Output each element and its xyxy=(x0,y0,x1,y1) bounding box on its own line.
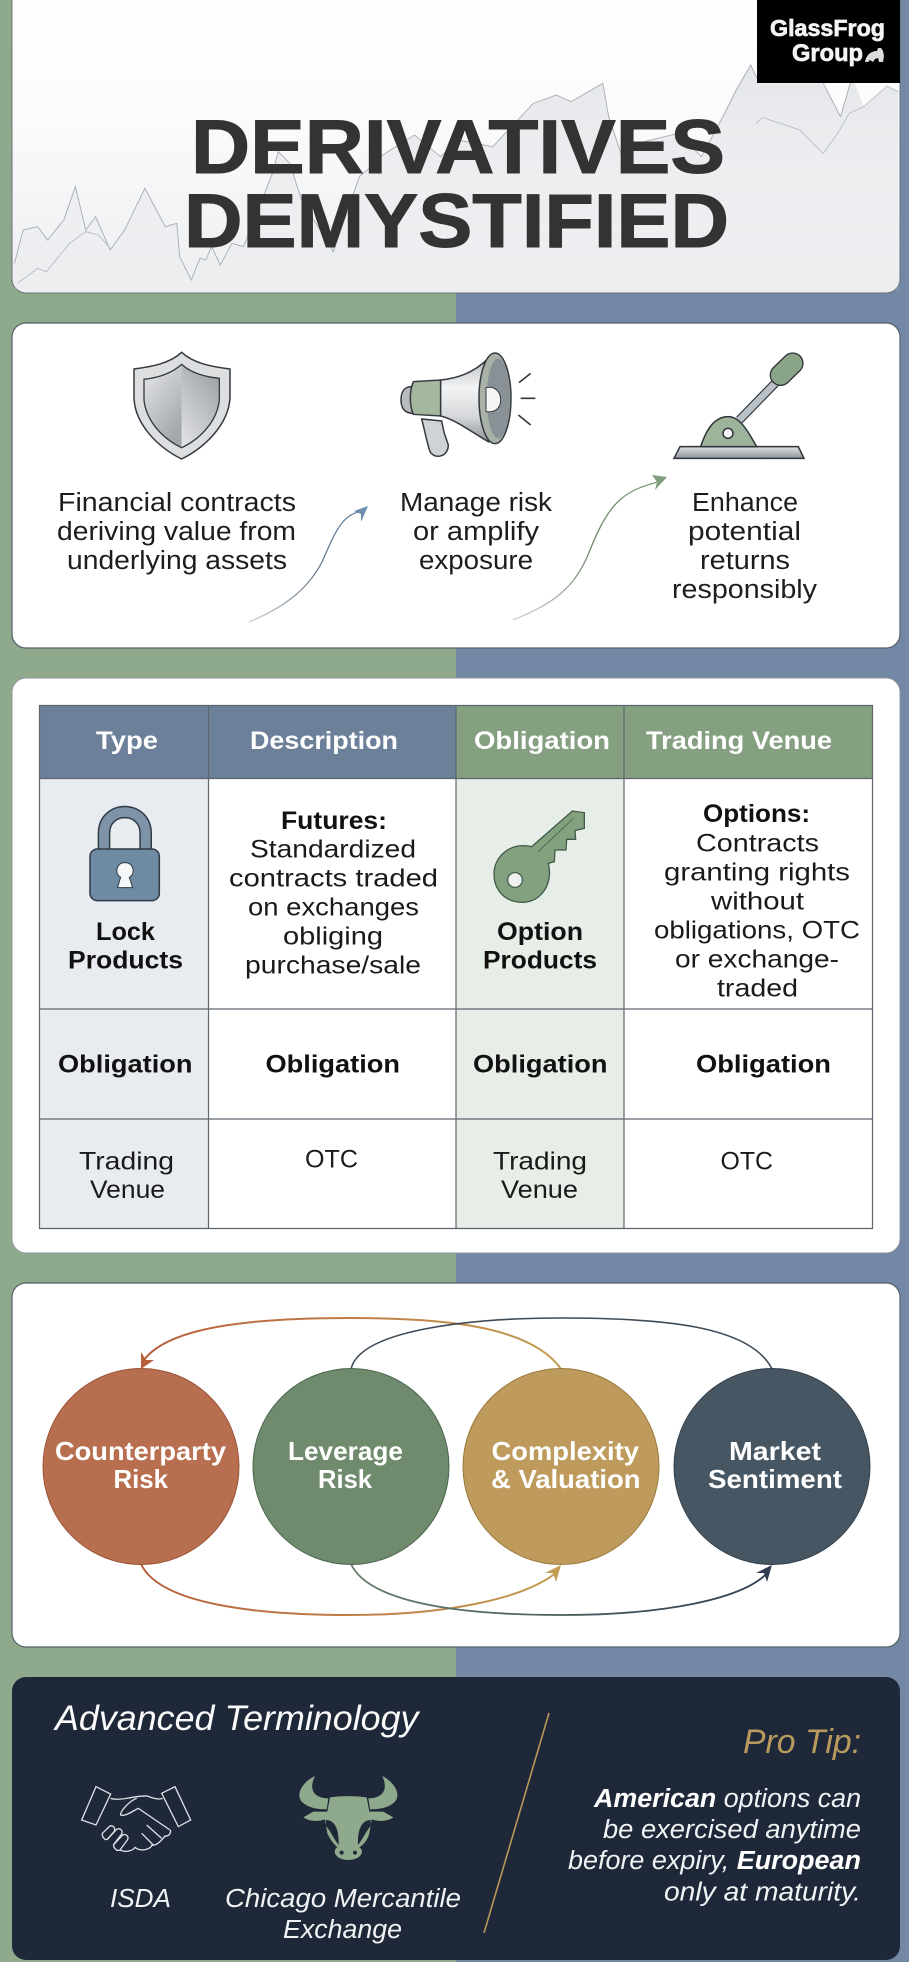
icon: key xyxy=(494,811,584,902)
table row: obligation: Obligation xyxy=(266,1050,400,1078)
label: chicago mercantile exchange xyxy=(225,1885,461,1944)
text: manage risk xyxy=(400,489,552,575)
text: pro tip body: only at maturity. xyxy=(664,1878,861,1906)
icon: handshake xyxy=(82,1787,191,1851)
icon: megaphone xyxy=(401,353,535,456)
text: option products: Option xyxy=(497,918,583,946)
text: options description: Contracts xyxy=(696,830,819,858)
table row: obligation: Obligation xyxy=(473,1050,608,1078)
node: complexity and valuation xyxy=(463,1368,659,1564)
text: futures description: Futures: xyxy=(281,807,387,835)
label: ISDA: ISDA xyxy=(110,1885,171,1913)
text: enhance returns: responsibly xyxy=(672,576,817,604)
text: futures description: Standardized xyxy=(250,836,416,864)
node: counterparty risk xyxy=(43,1368,239,1564)
node: leverage risk: Leverage xyxy=(288,1436,403,1466)
icon: lever xyxy=(674,363,804,458)
panel: hero title xyxy=(12,0,900,293)
panel: risk cycle xyxy=(12,1283,900,1647)
title: DERIVATIVES xyxy=(191,105,725,190)
node: counterparty risk: Risk xyxy=(114,1464,169,1494)
table xyxy=(40,706,872,1228)
text: options description: granting rights xyxy=(664,858,850,886)
icon: shield xyxy=(134,352,230,459)
text: options description: traded xyxy=(717,974,798,1002)
table row: trading venue: Venue xyxy=(501,1176,578,1204)
text: financial contracts xyxy=(57,489,296,575)
arrow: leverage to market sentiment top xyxy=(351,1318,772,1369)
text: options description: Options: xyxy=(703,800,810,828)
table row: trading venue: Venue xyxy=(90,1176,165,1204)
label: chicago mercantile exchange: Chicago Mercantile xyxy=(225,1885,461,1913)
text: financial contracts: Financial contracts xyxy=(58,489,296,517)
table row: obligation: Obligation xyxy=(696,1050,831,1078)
logo: GlassFrog Group xyxy=(757,0,900,83)
table row: trading venue: OTC xyxy=(305,1146,358,1174)
table row: trading venue: Trading xyxy=(79,1148,174,1176)
node: complexity and valuation: Complexity xyxy=(492,1436,640,1466)
table header xyxy=(96,727,832,755)
arrow: blue curve xyxy=(249,506,368,622)
table row: trading venue: Trading xyxy=(493,1148,587,1176)
node: leverage risk xyxy=(253,1368,449,1564)
text: enhance returns: Enhance xyxy=(692,489,798,517)
node: counterparty risk: Counterparty xyxy=(55,1436,227,1466)
text: pro tip body: American options can xyxy=(593,1785,861,1813)
text: options description: without xyxy=(710,888,804,916)
panel: advanced terminology xyxy=(12,1677,900,1960)
arrow: counterparty to complexity xyxy=(141,1564,561,1615)
table header: Type xyxy=(96,727,158,755)
logo: GlassFrog Group: Group xyxy=(792,40,863,67)
divider: gold slash xyxy=(484,1713,549,1933)
text: option products: Products xyxy=(483,946,597,974)
arrow: complexity to counterparty xyxy=(141,1318,561,1369)
table row: obligation: Obligation xyxy=(58,1050,192,1078)
table row: trading venue: OTC xyxy=(720,1148,773,1176)
heading: pro tip: Pro Tip: xyxy=(743,1723,861,1761)
title: DEMYSTIFIED xyxy=(184,179,729,264)
panel: product comparison table xyxy=(12,678,900,1253)
text: futures description: on exchanges xyxy=(248,894,419,922)
text: enhance returns xyxy=(672,489,817,604)
table header: Obligation xyxy=(474,727,610,755)
text: options description: obligations, OTC xyxy=(654,916,860,944)
arrow: green curve xyxy=(513,475,667,620)
label: chicago mercantile exchange: Exchange xyxy=(283,1916,402,1944)
table row: obligation xyxy=(58,1050,831,1078)
text: options description xyxy=(654,800,860,1002)
node: complexity and valuation: & Valuation xyxy=(491,1464,640,1494)
text: futures description: purchase/sale xyxy=(245,952,421,980)
text: pro tip body: before expiry, European xyxy=(568,1847,861,1875)
logo: GlassFrog Group: GlassFrog xyxy=(770,15,885,41)
text: manage risk: Manage risk xyxy=(400,489,552,517)
text: pro tip body xyxy=(568,1785,861,1906)
text: lock products: Lock xyxy=(96,918,155,946)
panel: key benefits xyxy=(12,323,900,648)
arrow: leverage to market sentiment bottom xyxy=(351,1564,772,1615)
text: futures description xyxy=(229,807,438,980)
node: leverage risk: Risk xyxy=(318,1464,373,1494)
text: financial contracts: deriving value from xyxy=(57,518,296,546)
text: option products xyxy=(483,918,597,974)
table header: Description xyxy=(250,727,398,755)
text: futures description: obliging xyxy=(283,922,383,950)
text: lock products xyxy=(68,918,183,974)
icon: bull head xyxy=(299,1776,397,1860)
text: enhance returns: returns xyxy=(700,547,790,575)
table header: Trading Venue xyxy=(646,727,832,755)
heading: advanced terminology: Advanced Terminology xyxy=(53,1699,421,1738)
text: pro tip body: be exercised anytime xyxy=(603,1816,861,1844)
node: market sentiment: Sentiment xyxy=(708,1464,842,1494)
text: futures description: contracts traded xyxy=(229,864,438,892)
text: enhance returns: potential xyxy=(688,518,801,546)
icon: padlock xyxy=(90,812,159,901)
text: manage risk: or amplify xyxy=(413,518,539,546)
text: lock products: Products xyxy=(68,946,183,974)
text: manage risk: exposure xyxy=(419,547,533,575)
text: financial contracts: underlying assets xyxy=(67,547,287,575)
table row: trading venue xyxy=(79,1146,773,1204)
chart: faint market line background xyxy=(14,65,899,290)
text: options description: or exchange- xyxy=(675,946,839,974)
node: market sentiment xyxy=(674,1368,870,1564)
title xyxy=(184,105,729,264)
node: market sentiment: Market xyxy=(729,1436,821,1466)
